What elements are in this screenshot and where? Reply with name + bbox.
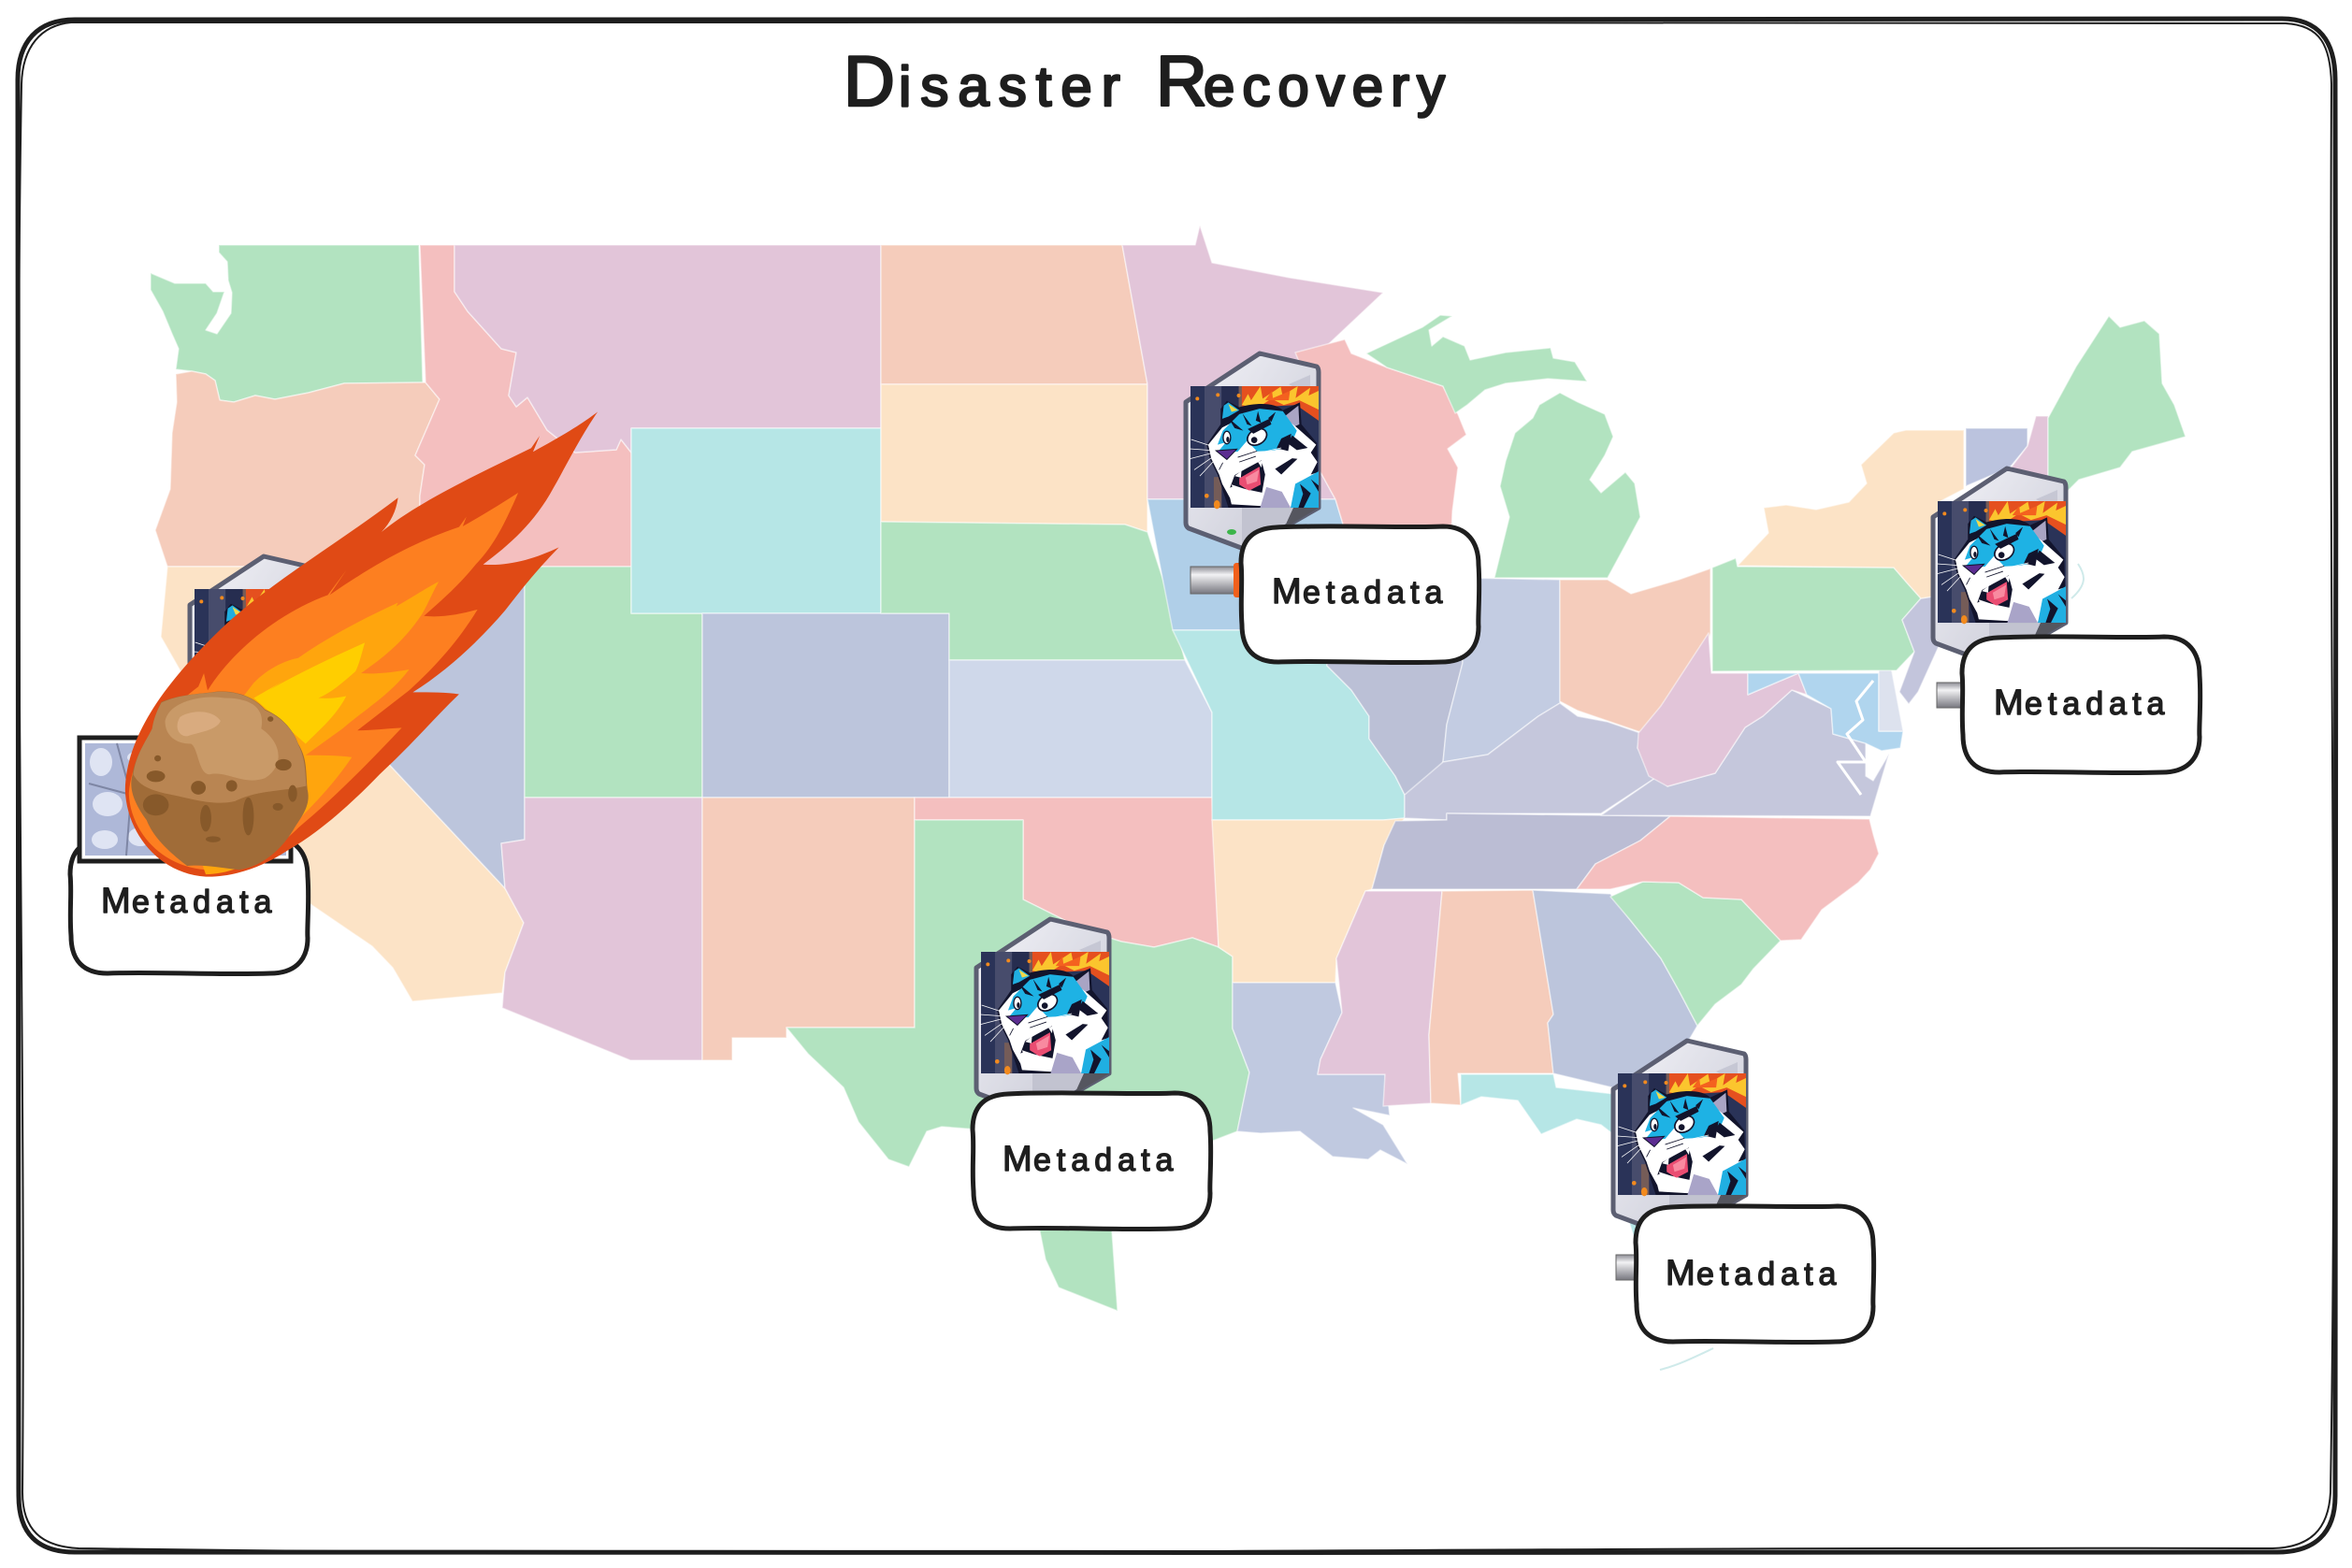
- state: Indiana: [1443, 578, 1560, 762]
- state: Arkansas: [1212, 818, 1405, 983]
- title: isaster: [899, 55, 1130, 118]
- state: New York: [1738, 430, 1964, 598]
- callout: metadata box: [1962, 637, 2200, 773]
- panel: site north central: [1186, 353, 1479, 663]
- Chesapeake and coast inlets: [1838, 681, 1873, 795]
- icon: server with tiger: [976, 919, 1109, 1115]
- state: Missouri: [1173, 630, 1405, 820]
- state: Louisiana: [1233, 983, 1407, 1164]
- icon: server with tiger: [1613, 1041, 1746, 1236]
- icon: server connector: [1616, 1255, 1638, 1280]
- panel: site southeast: [1613, 1041, 1874, 1343]
- state: Oregon: [155, 371, 440, 567]
- panel: site Texas: [973, 919, 1211, 1230]
- state: Kentucky: [1405, 703, 1658, 820]
- panel: site west (under meteor): [70, 556, 323, 974]
- callout: metadata box: etadata: [1303, 575, 1448, 611]
- state: Pennsylvania: [1712, 558, 1921, 671]
- panel: site northeast: [1933, 468, 2200, 773]
- callout: metadata box: [1241, 526, 1479, 663]
- state: Maine: [2048, 316, 2186, 493]
- state: Idaho: [415, 245, 631, 567]
- state: Ohio: [1560, 568, 1710, 732]
- icon: server with tiger: [190, 556, 323, 752]
- callout: metadata box: etadata: [1696, 1257, 1841, 1292]
- state: Nebraska: [881, 522, 1185, 660]
- state: New Mexico: [702, 798, 915, 1060]
- state: Georgia: [1533, 890, 1697, 1094]
- state: Florida: [1461, 1074, 1739, 1337]
- state: Arizona: [501, 798, 702, 1060]
- title: R: [1156, 42, 1207, 122]
- state: Oklahoma: [915, 798, 1219, 947]
- state: Wisconsin: [1295, 339, 1466, 580]
- callout: metadata box: M: [1003, 1140, 1032, 1179]
- state: Washington: [151, 245, 423, 402]
- meteor highlight: [178, 712, 221, 736]
- icon: server with tiger: [1933, 468, 2066, 664]
- state: California: [161, 567, 524, 1001]
- meteor light patches: [166, 698, 279, 781]
- state: South Carolina: [1610, 882, 1781, 1026]
- callout: metadata box: etadata: [1033, 1143, 1178, 1178]
- icon: server connector: [1937, 683, 1965, 708]
- state: Montana: [455, 245, 881, 453]
- state: Michigan upper: [1366, 315, 1587, 413]
- flame yellow: [253, 642, 365, 744]
- title: ecovery: [1204, 55, 1452, 118]
- state: North Dakota: [881, 245, 1147, 384]
- craters: [143, 716, 297, 842]
- state: Tennessee: [1372, 813, 1670, 889]
- state: Virginia: [1601, 690, 1889, 816]
- callout: metadata box: [70, 838, 309, 974]
- state: Minnesota: [1122, 225, 1383, 499]
- state: Vermont: [1966, 428, 2027, 486]
- title: D: [844, 42, 895, 122]
- callout: metadata box: [973, 1093, 1211, 1230]
- icon: shattered image frame: [79, 738, 291, 861]
- flame orange: [129, 493, 518, 870]
- state: Colorado: [702, 613, 949, 798]
- state: Illinois: [1327, 561, 1463, 795]
- state: Mississippi: [1318, 891, 1442, 1106]
- US state map: [151, 225, 2186, 1337]
- callout: metadata box: [1636, 1206, 1874, 1343]
- callout: metadata box: M: [101, 882, 131, 921]
- icon: server connector: [1190, 563, 1243, 597]
- callout: metadata box: M: [1272, 572, 1302, 611]
- icon: flaming meteor: [125, 411, 598, 877]
- meteor lit top: [134, 692, 307, 803]
- flame amber: [195, 582, 439, 874]
- state: New Hampshire: [2010, 416, 2048, 477]
- state: Alabama: [1429, 890, 1553, 1105]
- state: Wyoming: [631, 428, 881, 613]
- state: North Carolina: [1577, 816, 1879, 941]
- state: South Dakota: [881, 384, 1147, 532]
- meteor rock: [131, 691, 309, 870]
- flame outer: [125, 411, 598, 877]
- New England coast and Florida Keys traces: [1660, 564, 2084, 1370]
- state: Nevada: [290, 567, 525, 888]
- callout: metadata box: etadata: [132, 885, 277, 920]
- state: Maryland: [1748, 673, 1903, 751]
- state: New Jersey: [1899, 596, 1941, 704]
- state: Texas: [786, 820, 1249, 1311]
- state: Delaware: [1879, 667, 1903, 731]
- callout: metadata box: etadata: [2025, 686, 2170, 722]
- callout: metadata box: M: [1994, 683, 2024, 723]
- state: Utah: [525, 567, 702, 798]
- icon: server with tiger: [1186, 353, 1319, 549]
- state: Iowa: [1147, 499, 1357, 630]
- callout: metadata box: M: [1666, 1254, 1695, 1293]
- state: Kansas: [949, 660, 1212, 798]
- state: West Virginia: [1638, 633, 1807, 786]
- state: Michigan lower: [1494, 393, 1640, 578]
